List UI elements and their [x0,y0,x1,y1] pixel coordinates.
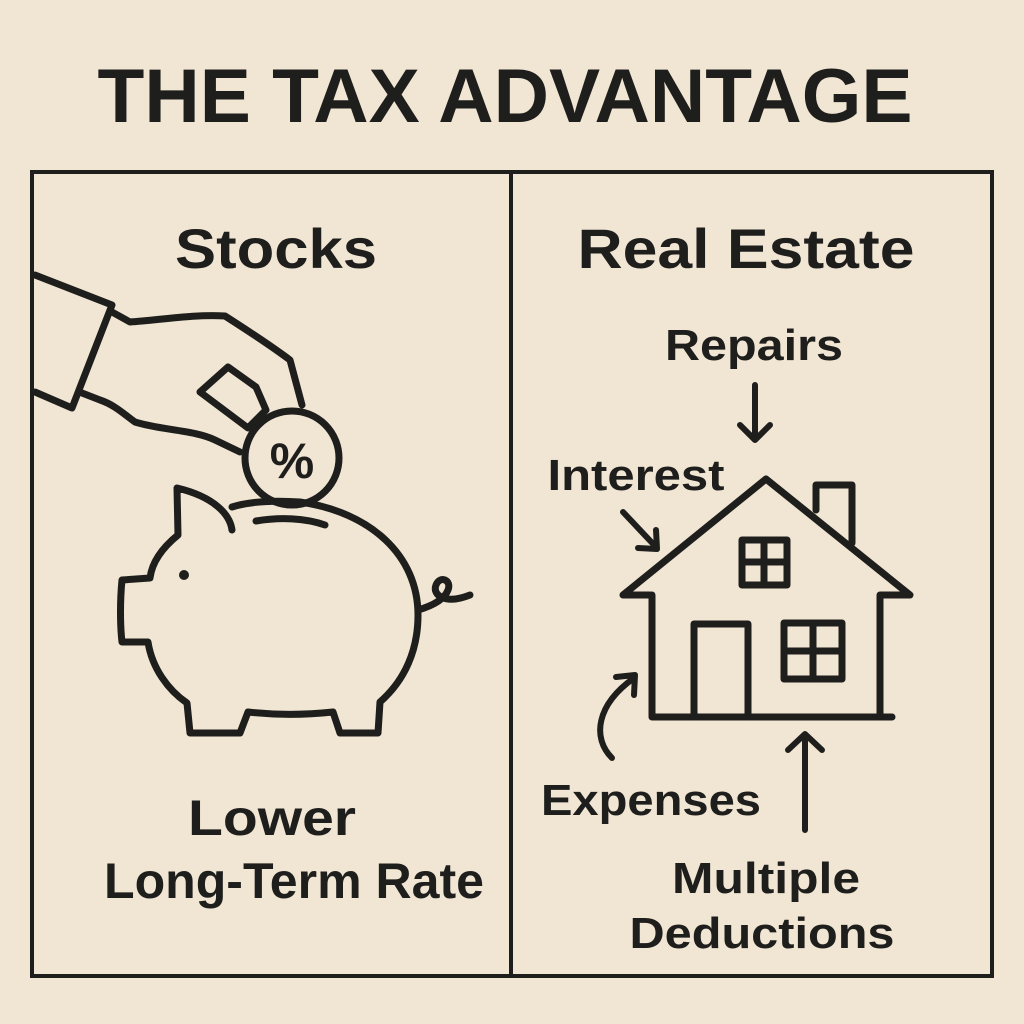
label: multiple deductions: Multiple [672,854,860,903]
arrow: repairs [740,385,770,440]
label: expenses: Expenses [541,776,761,825]
arrow: expenses [600,675,635,758]
panel: stocks: Long-Term Rate [104,853,484,909]
arrow: interest [623,512,657,549]
panel: real estate: Deductions [630,909,894,958]
icon: hand [35,275,302,452]
label: interest: Interest [548,451,725,500]
text: lower long-term rate: Lower [188,790,356,846]
frame [32,172,992,976]
icon: coin [245,411,339,505]
heading: real estate: Real Estate [578,217,914,280]
label: repairs: Repairs [665,321,843,370]
panel: stocks [35,217,484,909]
icon: piggy bank [120,488,470,733]
panel: real estate [541,217,914,958]
title: THE TAX ADVANTAGE [98,54,912,139]
icon: coin: % [270,433,314,489]
heading: stocks: Stocks [175,217,377,280]
icon: house [623,479,910,717]
arrow: deductions [788,734,822,830]
